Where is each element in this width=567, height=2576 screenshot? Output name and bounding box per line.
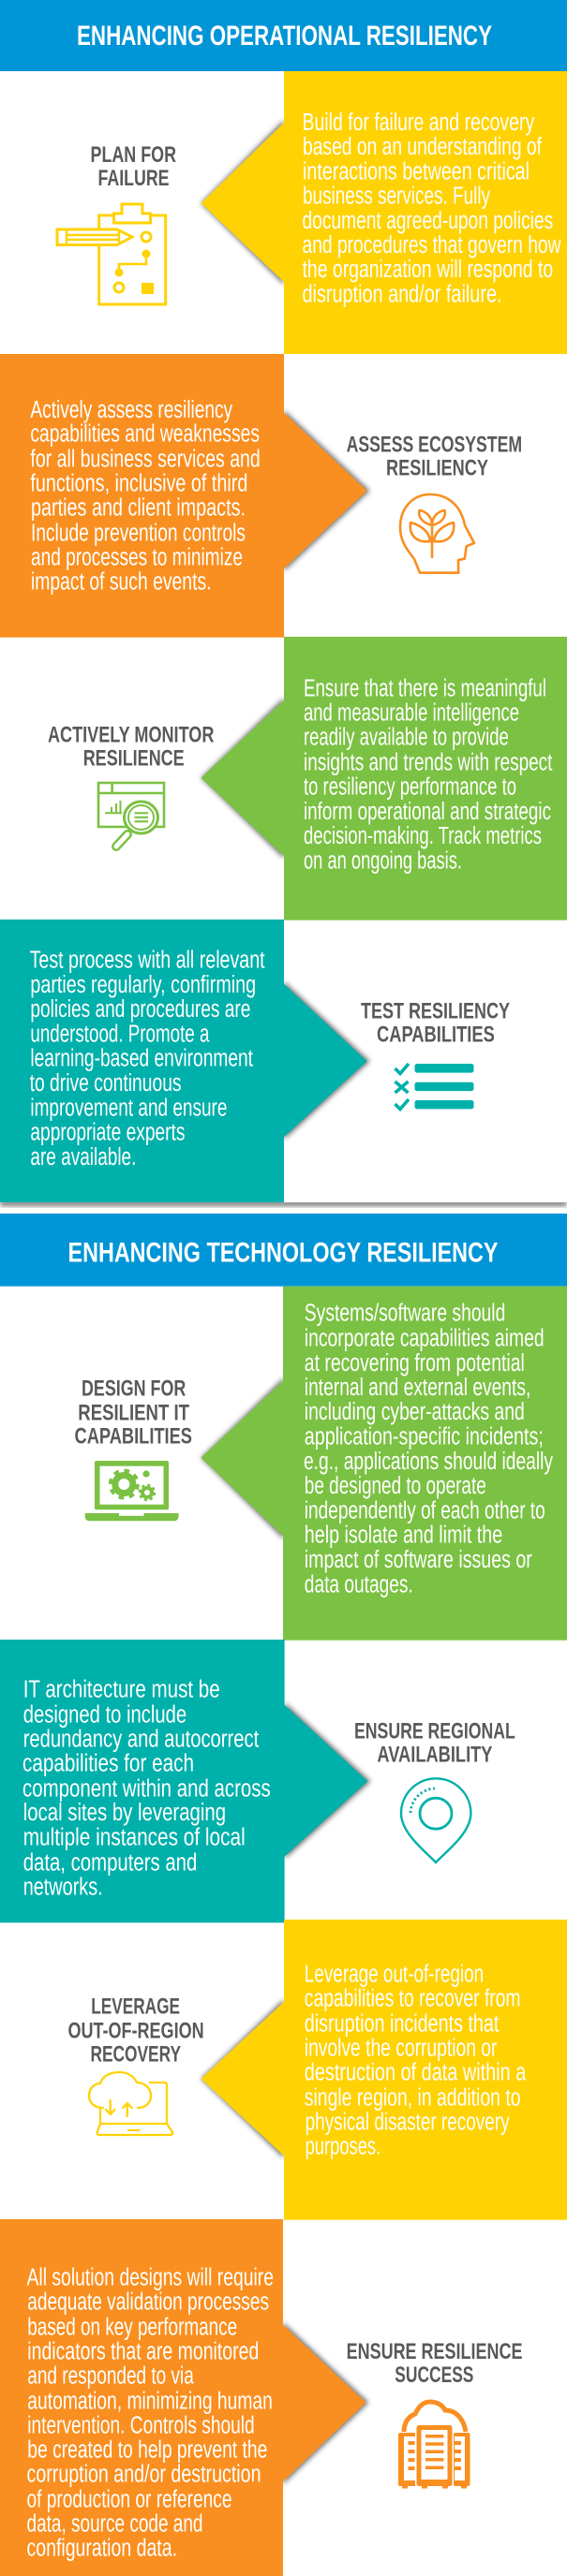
panel: design for resilient IT capabilities (75, 1287, 567, 1641)
panel: test resiliency capabilities: parties regularly, confirming (30, 972, 256, 998)
panel: ensure resilience success: intervention. Controls should (27, 2412, 255, 2438)
panel: test resiliency capabilities: improvement and ensure (30, 1096, 227, 1122)
section banner: technology resiliency (0, 1214, 567, 1287)
text: plan for failure description: business services. Fully (303, 184, 490, 210)
panel: ensure resilience success: adequate validation processes (27, 2289, 269, 2316)
icon: laptop with gears (85, 1461, 179, 1521)
panel: plan for failure: FAILURE (97, 166, 169, 191)
text: monitor description (304, 675, 552, 874)
panel: assess ecosystem resiliency: functions, inclusive of third (30, 470, 247, 496)
panel: ensure resilience success: and responded to via (27, 2363, 194, 2390)
panel: test resiliency capabilities: Test process with all relevant (30, 947, 265, 973)
panel: ensure resilience success: All solution designs will require (26, 2265, 274, 2291)
text: out-of-region description: Leverage out-of-region (305, 1962, 484, 1988)
panel: assess ecosystem resiliency: Actively assess resiliency (30, 397, 232, 423)
text: out-of-region description: involve the corruption or (305, 2035, 498, 2061)
panel: ensure regional availability: networks. (23, 1874, 103, 1900)
panel: ensure regional availability: data, computers and (23, 1849, 197, 1876)
text: out-of-region description (305, 1962, 527, 2160)
panel: test resiliency capabilities: are available. (30, 1144, 136, 1170)
icon: dashboard with magnifier (98, 783, 164, 846)
panel: assess ecosystem resiliency: and processes to minimize (31, 544, 243, 570)
panel: ensure regional availability (0, 1640, 515, 1922)
panel: ensure regional availability: designed to include (23, 1701, 187, 1728)
panel: assess ecosystem resiliency: capabilities and weaknesses (30, 421, 260, 448)
text: design description: Systems/software should (305, 1301, 505, 1327)
text: out-of-region description: purposes. (306, 2134, 380, 2160)
section banner: operational resiliency (0, 0, 567, 71)
text: design description: be designed to operate (305, 1473, 486, 1499)
panel: ensure resilience success: data, source code and (26, 2510, 202, 2537)
panel: test resiliency capabilities: appropriate experts (30, 1120, 185, 1146)
panel: design for resilient IT capabilities: CAPABILITIES (75, 1424, 192, 1450)
heading: ensure regional availability (354, 1719, 515, 1768)
panel: leverage out-of-region recovery: RECOVERY (90, 2042, 181, 2068)
text: out-of-region description: disruption incidents that (305, 2010, 499, 2037)
panel: actively monitor resilience: RESILIENCE (83, 745, 185, 771)
icon: clipboard with pencil (57, 204, 166, 304)
panel: assess ecosystem resiliency: Include prevention controls (31, 520, 246, 546)
panel: ensure resilience success: be created to help prevent the (27, 2436, 267, 2463)
icon: location pin (401, 1778, 470, 1862)
heading: test resiliency capabilities: TEST RESILIENCY (361, 998, 510, 1023)
icon: checklist (395, 1064, 474, 1109)
text: design description: data outages. (305, 1572, 413, 1598)
panel: assess ecosystem resiliency: impact of such events. (31, 568, 212, 595)
panel: assess ecosystem resiliency (0, 354, 522, 638)
panel: ensure resilience success: corruption and/or destruction (26, 2462, 261, 2488)
panel: leverage out-of-region recovery: LEVERAGE (91, 1995, 180, 2020)
panel: test resiliency capabilities: learning-based environment (30, 1046, 253, 1072)
heading: assess ecosystem resiliency (347, 433, 522, 480)
panel: ensure resilience success: based on key performance (27, 2314, 237, 2340)
panel: test resiliency capabilities: policies and procedures are (30, 996, 250, 1023)
panel: test resiliency capabilities (0, 920, 567, 1206)
panel: ensure regional availability: IT architecture must be (23, 1677, 220, 1703)
panel: ensure resilience success: indicators that are monitored (27, 2338, 259, 2364)
icon: head with plant (400, 494, 474, 573)
panel: ensure resilience success: automation, minimizing human (27, 2388, 273, 2414)
panel: assess ecosystem resiliency: parties and client impacts. (31, 495, 246, 522)
icon: cloud and laptop (89, 2072, 172, 2135)
panel: ensure resilience success (0, 2219, 523, 2576)
panel: leverage out-of-region recovery (67, 1920, 567, 2220)
panel: design for resilient IT capabilities: DESIGN FOR (82, 1376, 187, 1402)
heading: assess ecosystem resiliency: RESILIENCY (386, 455, 488, 480)
panel: ensure regional availability: component within and across (22, 1775, 271, 1802)
heading: test resiliency capabilities (361, 998, 510, 1048)
icon: cloud servers (398, 2402, 470, 2489)
panel: ensure regional availability: capabilities for each (22, 1751, 194, 1777)
panel: ensure resilience success: configuration data. (26, 2535, 177, 2561)
panel: test resiliency capabilities: understood. Promote a (30, 1022, 210, 1048)
panel: assess ecosystem resiliency: for all business services and (30, 446, 261, 472)
panel: ensure regional availability: local sites by leveraging (23, 1800, 226, 1826)
panel: test resiliency capabilities: to drive continuous (30, 1070, 182, 1097)
panel: ensure regional availability: redundancy and autocorrect (23, 1726, 259, 1752)
panel: actively monitor resilience (48, 637, 567, 920)
panel: ensure regional availability: multiple instances of local (23, 1825, 246, 1851)
heading: ensure regional availability: AVAILABILITY (377, 1743, 493, 1768)
text: design description (304, 1301, 553, 1598)
panel: ensure resilience success: of production or reference (26, 2486, 232, 2512)
panel: plan for failure: PLAN FOR (90, 142, 176, 168)
heading: test resiliency capabilities: CAPABILITIES (377, 1023, 495, 1048)
text: design description: help isolate and limit the (305, 1523, 502, 1549)
panel: leverage out-of-region recovery: OUT-OF-REGION (67, 2019, 204, 2044)
text: plan for failure description (302, 110, 561, 308)
heading: ensure resilience success (347, 2339, 523, 2388)
panel: design for resilient IT capabilities: RESILIENT IT (78, 1401, 189, 1426)
heading: ensure resilience success: SUCCESS (395, 2363, 473, 2388)
text: plan for failure description: disruption and/or failure. (302, 282, 502, 308)
panel: plan for failure (57, 71, 567, 354)
text: monitor description: on an ongoing basis. (304, 847, 462, 874)
panel: actively monitor resilience: ACTIVELY MONITOR (48, 723, 215, 748)
